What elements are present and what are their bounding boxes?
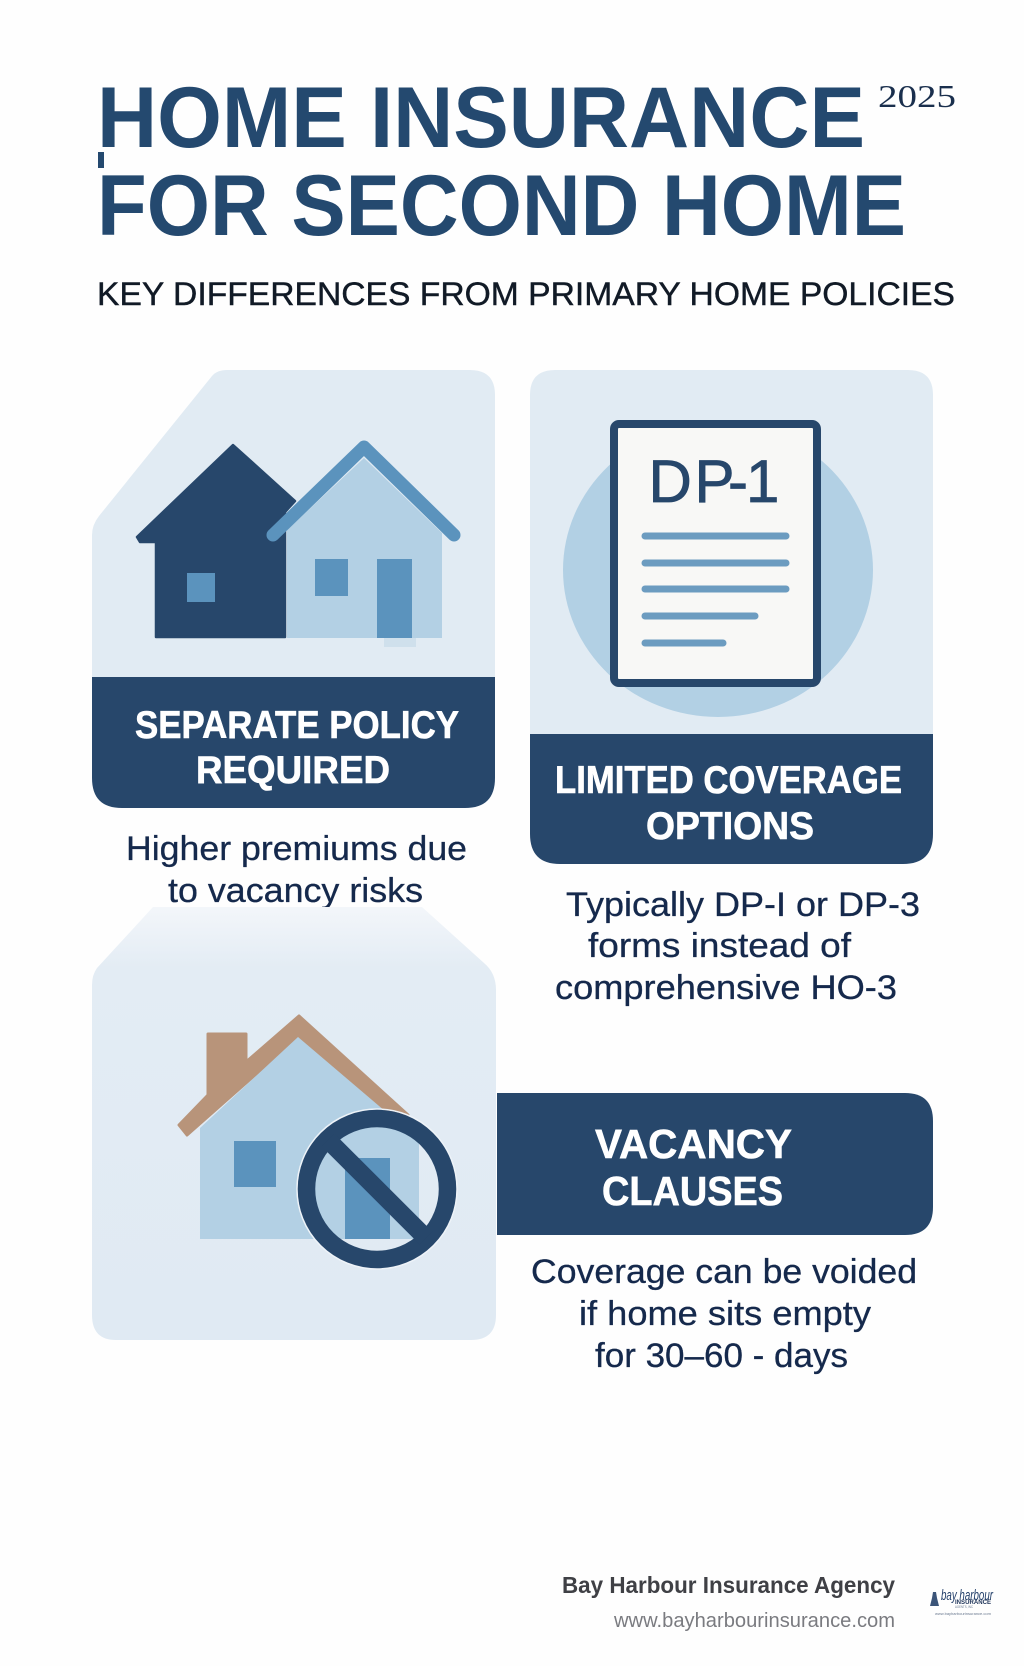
year label: 2025	[878, 78, 956, 114]
description: if home sits empty	[579, 1295, 871, 1333]
heading band	[497, 1093, 933, 1235]
card background	[92, 907, 496, 1340]
heading text	[555, 759, 902, 848]
title	[97, 70, 906, 254]
heading text	[135, 704, 459, 792]
heading band	[92, 677, 495, 808]
icon: two houses	[137, 445, 454, 647]
footer logo: www.bayharbourinsurance.com	[935, 1612, 991, 1616]
heading band	[530, 734, 933, 864]
heading text: REQUIRED	[196, 749, 390, 792]
card background	[92, 370, 495, 690]
description	[531, 1253, 917, 1375]
title: FOR SECOND HOME	[97, 158, 906, 254]
footer agency name: Bay Harbour Insurance Agency	[562, 1572, 895, 1598]
description: Higher premiums due	[126, 830, 467, 868]
footer website: www.bayharbourinsurance.com	[613, 1610, 895, 1632]
heading text: VACANCY	[595, 1121, 792, 1167]
icon: policy document: DP-1	[648, 448, 779, 515]
description	[126, 830, 467, 910]
panel: separate policy required	[92, 370, 495, 910]
description: comprehensive HO-3	[555, 969, 897, 1007]
heading text: OPTIONS	[646, 805, 814, 848]
panel: limited coverage options	[530, 370, 933, 1007]
panel: vacancy clauses	[92, 907, 933, 1375]
footer logo: AGENTS, INC	[955, 1604, 973, 1609]
footer logo	[930, 1587, 994, 1616]
description	[555, 886, 920, 1007]
icon: vacant house with prohibition sign	[179, 1016, 457, 1269]
description: forms instead of	[588, 927, 852, 965]
subtitle: KEY DIFFERENCES FROM PRIMARY HOME POLICIES	[97, 276, 955, 312]
heading text: LIMITED COVERAGE	[555, 759, 902, 802]
description: Coverage can be voided	[531, 1253, 917, 1291]
footer logo: bay harbour	[941, 1587, 994, 1604]
description: for 30–60 - days	[595, 1337, 848, 1375]
footer logo: INSURANCE	[955, 1600, 991, 1606]
description: to vacancy risks	[168, 872, 423, 910]
card background	[530, 370, 933, 745]
description: Typically DP-I or DP-3	[566, 886, 920, 924]
heading text: CLAUSES	[602, 1168, 783, 1214]
title: HOME INSURANCE	[97, 70, 865, 166]
icon: policy document	[563, 423, 873, 717]
heading text: SEPARATE POLICY	[135, 704, 459, 747]
heading text	[595, 1121, 792, 1214]
